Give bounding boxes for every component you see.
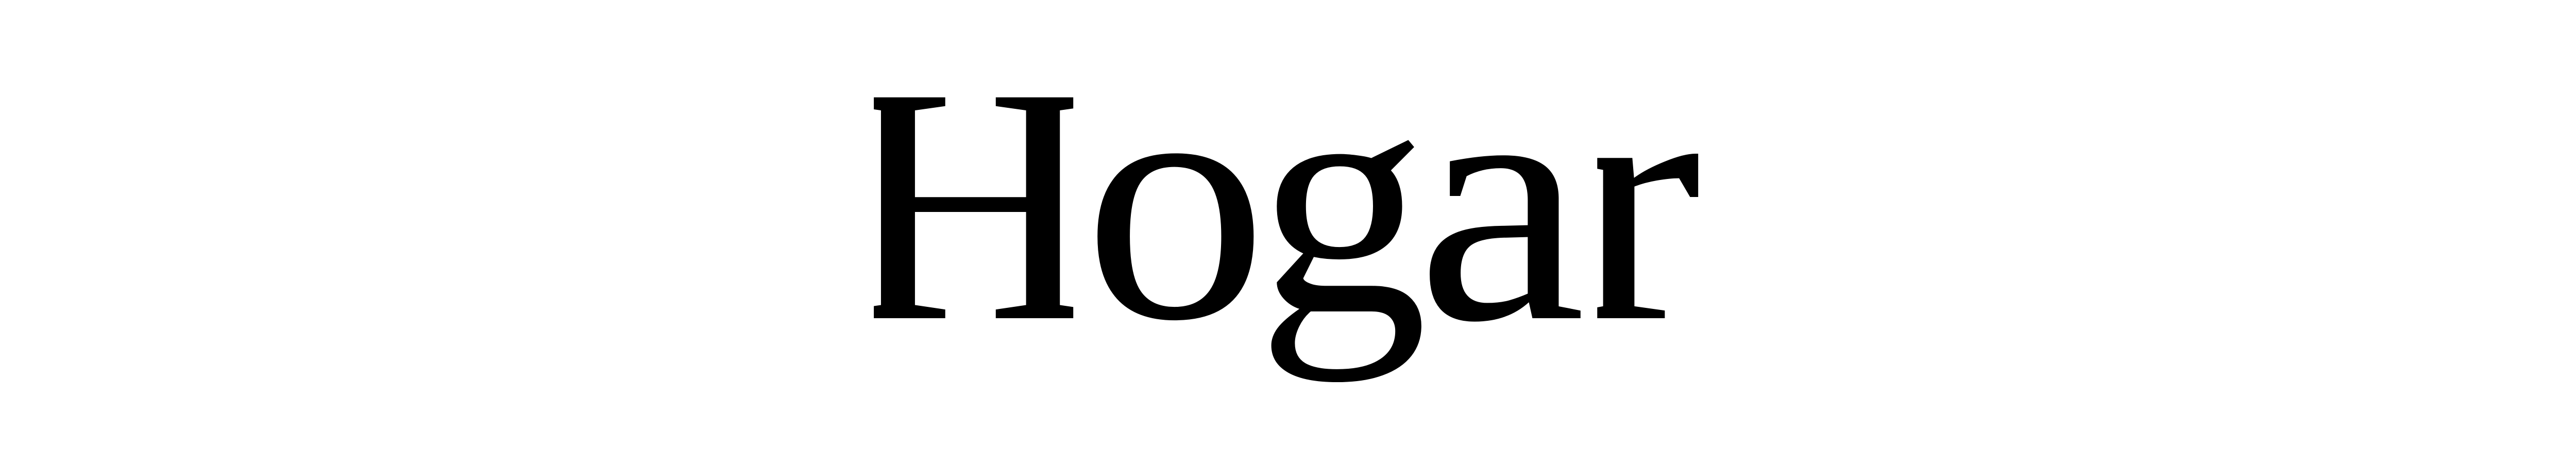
title: Hogar: H — [840, 18, 1101, 391]
title: Hogar: g — [1257, 15, 1428, 383]
title: Hogar: a — [1416, 9, 1586, 393]
title: Hogar — [874, 8, 1698, 393]
title: Hogar: r — [1573, 7, 1702, 394]
title: Hogar: o — [1083, 8, 1267, 392]
